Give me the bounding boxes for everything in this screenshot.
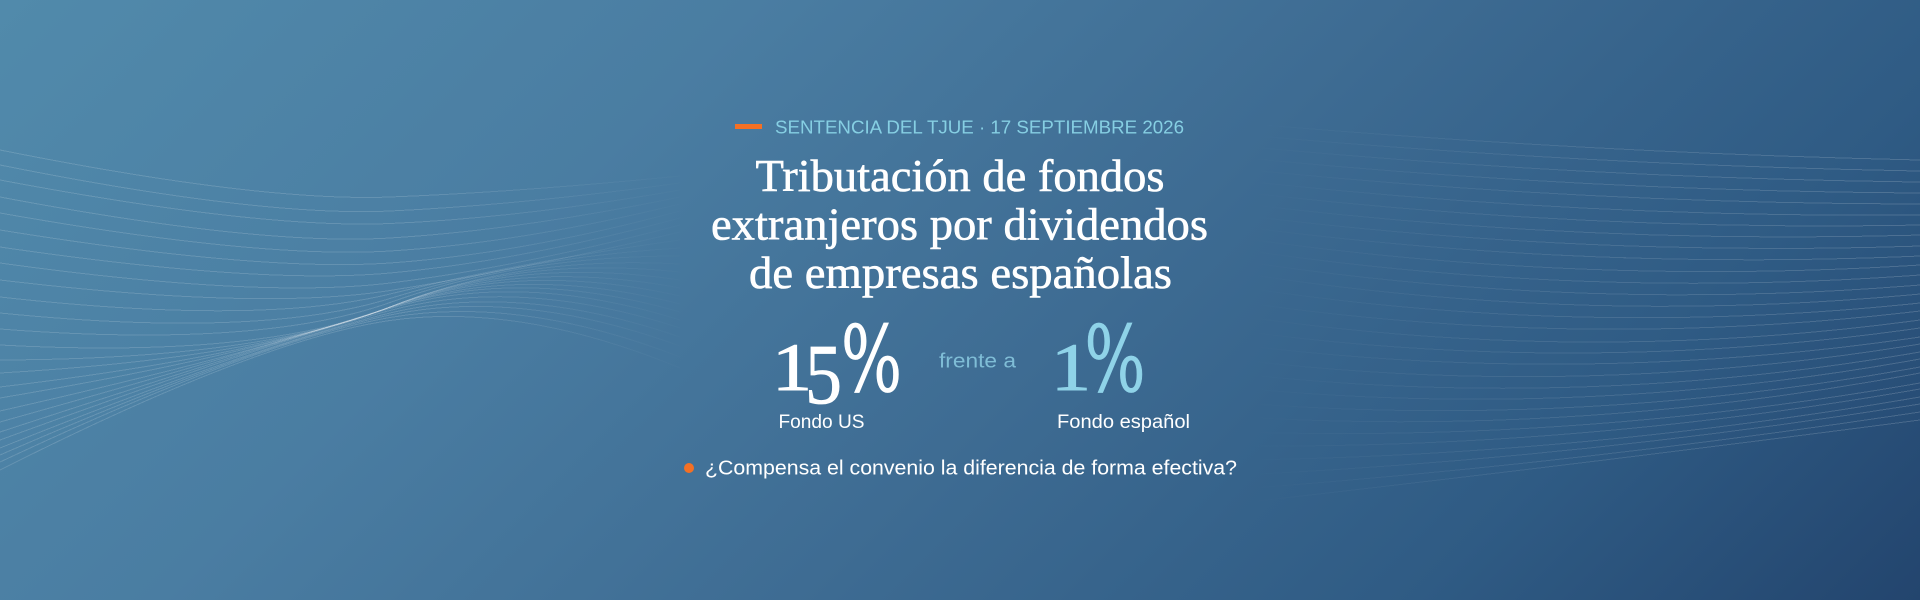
left wave line pattern — [0, 150, 680, 470]
label: Fondo US — [778, 412, 864, 433]
title — [711, 150, 1208, 298]
key question — [684, 458, 1237, 480]
eyebrow text: SENTENCIA DEL TJUE · 17 SEPTIEMBRE 2026 — [775, 118, 1184, 138]
title: Tributación de fondos — [756, 150, 1164, 201]
orange bullet — [684, 463, 694, 473]
digit one: 1 — [772, 329, 812, 405]
orange accent bar — [735, 124, 762, 129]
title: extranjeros por dividendos — [711, 198, 1208, 250]
digit one: 1 — [1051, 329, 1091, 405]
question text: ¿Compensa el convenio la diferencia de forma efectiva? — [705, 458, 1237, 480]
stat: 15% — [772, 306, 902, 433]
stat: 1% — [1051, 306, 1190, 433]
percent sign: % — [1084, 306, 1146, 413]
eyebrow: ruling and date — [735, 118, 1184, 138]
right wave line pattern — [1240, 123, 1920, 503]
comparison text: frente a — [939, 350, 1017, 372]
label: Fondo español — [1057, 412, 1190, 433]
digit five: 5 — [805, 326, 842, 422]
title: de empresas españolas — [749, 247, 1172, 298]
percent sign: % — [841, 306, 902, 413]
